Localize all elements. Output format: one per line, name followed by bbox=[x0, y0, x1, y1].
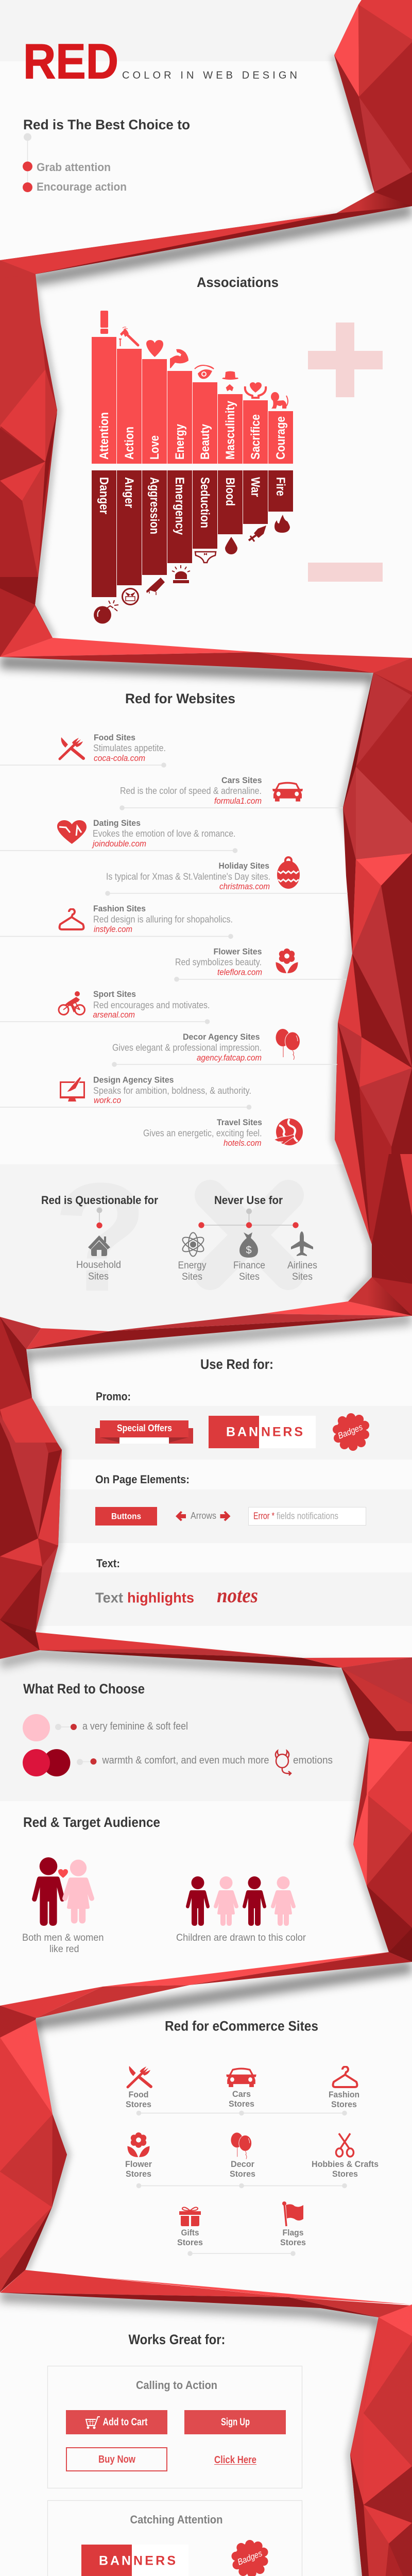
chart: negative associations: Aggression bbox=[147, 477, 161, 534]
icon: devil bbox=[276, 1751, 291, 1775]
panel: catching attention bbox=[47, 2501, 302, 2576]
store: flags bbox=[280, 2201, 306, 2247]
panel: catching attention: Catching Attention bbox=[130, 2513, 222, 2526]
chart: negative associations: Danger bbox=[97, 477, 111, 514]
store: hobbies: Hobbies & Crafts bbox=[312, 2159, 379, 2169]
site: holiday: Is typical for Xmas & St.Valentine's Day sites. bbox=[106, 872, 270, 882]
site: dating: Dating Sites bbox=[93, 818, 141, 828]
site: food: coca-cola.com bbox=[94, 753, 145, 763]
list: best choice reasons: Encourage action bbox=[37, 180, 127, 193]
element: button bbox=[95, 1507, 157, 1526]
heading: red and target audience: Red & Target Audience bbox=[23, 1815, 160, 1830]
store: flags: Flags bbox=[282, 2228, 304, 2238]
element: text highlights bbox=[95, 1590, 194, 1605]
panel: never use: Sites bbox=[292, 1272, 313, 1282]
site: cars: Red is the color of speed & adrenaline. bbox=[120, 786, 262, 796]
chart: negative associations: Blood bbox=[223, 478, 237, 506]
banner bbox=[81, 2545, 188, 2576]
heading: red for ecommerce sites: Red for eCommerce Sites bbox=[165, 2019, 318, 2034]
icon: atom bbox=[181, 1232, 205, 1256]
polygon column: left side use red for bbox=[0, 1317, 62, 1659]
title: COLOR IN WEB DESIGN bbox=[122, 70, 297, 81]
element: notes: notes bbox=[217, 1584, 258, 1607]
store row 3 bbox=[177, 2201, 306, 2256]
element: button: Buttons bbox=[111, 1512, 141, 1521]
element: error field: fields notifications bbox=[277, 1511, 338, 1521]
site: food: Stimulates appetite. bbox=[93, 743, 166, 753]
badge bbox=[231, 2540, 268, 2576]
store: cars: Stores bbox=[229, 2099, 254, 2109]
heading: red is the best choice to: Red is The Best Choice to bbox=[23, 117, 190, 132]
polygon column: left side ecommerce bbox=[0, 2006, 67, 2292]
panel: never use: Energy bbox=[178, 1260, 207, 1271]
figures: children bbox=[176, 1876, 306, 1943]
icon: house bbox=[88, 1235, 110, 1256]
store: decor: Decor bbox=[231, 2159, 254, 2169]
site: decor agency bbox=[112, 1029, 337, 1067]
chart: positive associations: Energy bbox=[173, 423, 187, 460]
store: hobbies: Stores bbox=[332, 2169, 358, 2179]
button: add to cart bbox=[66, 2410, 167, 2434]
polygon column: right side what red to choose bbox=[341, 1657, 412, 1962]
subheading: promo: Promo: bbox=[96, 1390, 131, 1403]
icon: money bag: $ bbox=[246, 1245, 252, 1256]
store: gifts bbox=[177, 2207, 203, 2247]
site: cars: formula1.com bbox=[214, 796, 262, 806]
site: flower: Red symbolizes beauty. bbox=[175, 957, 262, 968]
site: travel: Travel Sites bbox=[217, 1117, 262, 1127]
store: flower: Stores bbox=[126, 2169, 151, 2179]
icon: money bag bbox=[239, 1232, 258, 1258]
site: sport: Sport Sites bbox=[93, 989, 136, 999]
store: food: Stores bbox=[126, 2099, 151, 2109]
site: decor agency: Decor Agency Sites bbox=[183, 1032, 260, 1042]
swatch row: pink: a very feminine & soft feel bbox=[82, 1721, 188, 1732]
figures: man and woman: like red bbox=[49, 1944, 79, 1955]
polygon ribbon: sixth band bbox=[0, 2270, 412, 2317]
store: food bbox=[126, 2066, 151, 2109]
swatch row: crimson: emotions bbox=[293, 1755, 333, 1766]
banner: NERS bbox=[133, 2553, 176, 2568]
heading: what red to choose: What Red to Choose bbox=[23, 1681, 145, 1697]
site: food: Food Sites bbox=[94, 733, 135, 742]
site: design agency: Design Agency Sites bbox=[93, 1075, 174, 1085]
figures: man and woman: Both men & women bbox=[22, 1933, 104, 1943]
button: buy now: Buy Now bbox=[98, 2454, 135, 2465]
swatch row: crimson: warmth & comfort, and even much more bbox=[102, 1755, 269, 1766]
element: error field: Error * bbox=[253, 1511, 274, 1521]
title: RED bbox=[23, 34, 118, 89]
heading: red for websites: Red for Websites bbox=[125, 691, 235, 706]
chart: positive associations: Action bbox=[123, 427, 136, 460]
element: arrows bbox=[176, 1511, 231, 1521]
badge: Badges bbox=[236, 2548, 264, 2567]
store: fashion: Stores bbox=[331, 2099, 357, 2109]
site: fashion: Fashion Sites bbox=[93, 904, 146, 913]
button: buy now bbox=[66, 2448, 167, 2471]
site: travel bbox=[143, 1117, 303, 1148]
banner: BAN bbox=[99, 2553, 131, 2568]
icons: negative associations bbox=[94, 515, 290, 623]
site: dating: Evokes the emotion of love & romance. bbox=[93, 828, 236, 839]
site: flower: Flower Sites bbox=[213, 947, 262, 956]
polygon ribbon: top right corner and first band bbox=[0, 0, 412, 274]
store: cars: Cars bbox=[232, 2089, 251, 2099]
chart: positive associations: Courage bbox=[274, 416, 288, 460]
panel: never use bbox=[178, 1194, 317, 1282]
polygon ribbon: fourth band bbox=[36, 1632, 412, 1668]
list: best choice reasons: Grab attention bbox=[37, 161, 111, 174]
chart: negative associations: Emergency bbox=[173, 477, 186, 535]
site: flower bbox=[174, 947, 347, 981]
store: decor: Stores bbox=[230, 2169, 255, 2179]
store: decor bbox=[230, 2132, 255, 2179]
site: fashion bbox=[0, 904, 233, 939]
promo: ribbon special offers: Special Offers bbox=[117, 1423, 172, 1433]
icon: airplane bbox=[291, 1231, 313, 1256]
polygon column: right side websites bbox=[335, 658, 412, 1316]
site: dating: joindouble.com bbox=[92, 839, 146, 849]
site: fashion: instyle.com bbox=[94, 924, 132, 934]
panel: questionable: Household bbox=[76, 1260, 121, 1270]
panel: calling to action bbox=[47, 2366, 302, 2488]
site: holiday: Holiday Sites bbox=[218, 861, 269, 871]
site: travel: hotels.com bbox=[224, 1138, 262, 1148]
site: holiday: christmas.com bbox=[219, 882, 270, 891]
polygon column: left side associations bbox=[0, 260, 57, 657]
store row 1 bbox=[126, 2066, 359, 2115]
figures: man and woman bbox=[22, 1857, 104, 1955]
swatch row: pink bbox=[23, 1714, 188, 1741]
panel: never use: Sites bbox=[182, 1272, 202, 1282]
store: fashion bbox=[329, 2066, 359, 2109]
panel: never use: Airlines bbox=[287, 1260, 317, 1271]
store: hobbies bbox=[312, 2133, 379, 2179]
panel: never use: Finance bbox=[233, 1260, 265, 1271]
heading: associations: Associations bbox=[197, 275, 279, 290]
subheading: on page elements: On Page Elements: bbox=[95, 1473, 190, 1486]
element: arrows: Arrows bbox=[191, 1511, 216, 1521]
button: sign up: Sign Up bbox=[221, 2416, 250, 2428]
element: error field bbox=[248, 1507, 366, 1525]
button: add to cart: Add to Cart bbox=[103, 2416, 148, 2428]
site: sport bbox=[0, 989, 210, 1024]
heading: never use: Never Use for bbox=[214, 1194, 283, 1207]
store: cars bbox=[226, 2067, 256, 2109]
subheading: text: Text: bbox=[96, 1557, 120, 1570]
button: sign up bbox=[184, 2410, 286, 2434]
title bbox=[23, 34, 297, 89]
chart: negative associations: Seduction bbox=[198, 477, 212, 528]
panel: questionable: Sites bbox=[88, 1272, 109, 1282]
polygon ribbon: second band bbox=[0, 638, 412, 673]
site: sport: arsenal.com bbox=[93, 1010, 135, 1020]
store: flower bbox=[125, 2132, 152, 2179]
chart: negative associations: War bbox=[248, 477, 262, 497]
site: design agency bbox=[0, 1075, 251, 1110]
panel: questionable: ? bbox=[53, 1150, 148, 1324]
store: gifts: Gifts bbox=[181, 2228, 199, 2238]
chart: negative associations: Fire bbox=[273, 477, 287, 496]
site: holiday bbox=[105, 856, 348, 896]
site: design agency: Speaks for ambition, boldness, & authority. bbox=[93, 1086, 251, 1096]
icon: pink minus bbox=[308, 563, 383, 582]
chart: positive associations bbox=[92, 337, 293, 464]
chart: positive associations: Love bbox=[148, 435, 162, 460]
link: click here: Click Here bbox=[214, 2454, 256, 2466]
site: design agency: work.co bbox=[94, 1095, 121, 1105]
heading: works great for: Works Great for: bbox=[129, 2332, 226, 2347]
site: sport: Red encourages and motivates. bbox=[93, 1000, 210, 1010]
heading: use red for: Use Red for: bbox=[200, 1357, 273, 1372]
promo: badge: Badges bbox=[336, 1422, 364, 1441]
site: dating bbox=[0, 818, 237, 853]
promo: badge bbox=[333, 1413, 369, 1451]
store row 2 bbox=[125, 2132, 379, 2188]
site: decor agency: agency.fatcap.com bbox=[197, 1053, 262, 1062]
list: best choice reasons bbox=[23, 133, 127, 193]
chart: positive associations: Beauty bbox=[198, 423, 212, 460]
promo: banner: NERS bbox=[261, 1425, 303, 1439]
chart: positive associations: Sacrifice bbox=[249, 414, 263, 460]
store: food: Food bbox=[129, 2090, 148, 2099]
element: text highlights: Text bbox=[95, 1590, 123, 1605]
element: text highlights: highlights bbox=[127, 1590, 194, 1605]
panel: never use: Sites bbox=[239, 1272, 260, 1282]
promo: banner: BAN bbox=[226, 1425, 258, 1439]
site: flower: teleflora.com bbox=[217, 968, 262, 977]
promo: banner bbox=[209, 1416, 316, 1448]
swatch row: crimson bbox=[23, 1749, 333, 1776]
site: cars bbox=[119, 775, 343, 810]
store: fashion: Fashion bbox=[329, 2090, 359, 2099]
store: flower: Flower bbox=[125, 2159, 152, 2169]
icons: positive associations bbox=[100, 311, 288, 409]
site: travel: Gives an energetic, exciting feel. bbox=[143, 1128, 262, 1139]
icon: pink plus bbox=[308, 323, 383, 397]
chart: positive associations: Attention bbox=[97, 412, 111, 460]
store: gifts: Stores bbox=[177, 2238, 203, 2247]
heading: questionable: Red is Questionable for bbox=[41, 1194, 158, 1207]
promo: ribbon special offers bbox=[95, 1420, 193, 1444]
site: decor agency: Gives elegant & professional impression. bbox=[112, 1043, 262, 1053]
panel: calling to action: Calling to Action bbox=[136, 2379, 217, 2392]
site: fashion: Red design is alluring for shopaholics. bbox=[93, 914, 233, 924]
figures: children: Children are drawn to this color bbox=[176, 1933, 306, 1943]
chart: negative associations: Anger bbox=[122, 477, 136, 508]
polygon column: right side works great for bbox=[350, 2304, 412, 2576]
site: food bbox=[0, 733, 166, 768]
chart: positive associations: Masculinity bbox=[224, 400, 237, 460]
polygon ribbon: fifth band bbox=[0, 1952, 412, 2020]
store: flags: Stores bbox=[280, 2238, 306, 2247]
site: cars: Cars Sites bbox=[221, 775, 262, 785]
chart: negative associations bbox=[92, 470, 293, 597]
polygon ribbon: third band bbox=[0, 1301, 412, 1349]
